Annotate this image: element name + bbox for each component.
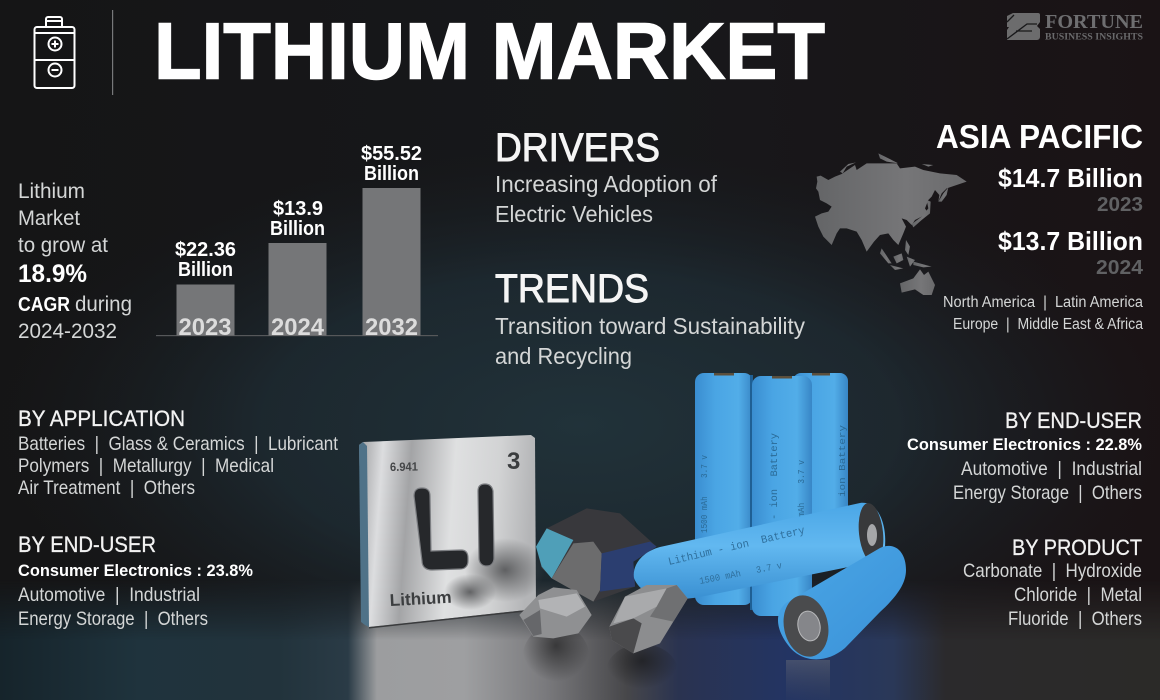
rock: small left <box>519 587 592 638</box>
bar 2023: $22.36 <box>175 239 236 261</box>
by application <box>18 406 338 499</box>
battery lying <box>634 502 886 599</box>
logo: Fortune Business Insights <box>1007 12 1143 42</box>
drivers: Increasing Adoption of <box>495 171 718 197</box>
by end-user right <box>907 408 1142 504</box>
by end-user left: Consumer Electronics : 23.8% <box>18 561 253 580</box>
element tile: lithium <box>359 435 545 628</box>
bar 2023 <box>175 239 236 341</box>
CAGR text block: Market <box>18 207 80 230</box>
Asia Pacific figures: 2024 <box>1096 257 1144 279</box>
CAGR text block: to grow at <box>18 234 108 257</box>
Asia Pacific figures: ASIA PACIFIC <box>936 118 1143 155</box>
battery centre: - ion Battery <box>769 433 781 520</box>
bar 2023: 2023 <box>178 314 232 341</box>
element tile: lithium: Lithium <box>389 588 452 610</box>
by product <box>963 535 1142 630</box>
battery lying: Lithium - ion Battery <box>667 525 807 569</box>
by end-user right: BY END-USER <box>1005 408 1142 433</box>
by product: Chloride | Metal <box>1014 584 1142 606</box>
bar 2032: $55.52 <box>361 143 422 165</box>
batteries standing <box>695 373 848 616</box>
background <box>0 195 1160 700</box>
lithium symbol letters <box>414 484 494 570</box>
by end-user right: Consumer Electronics : 22.8% <box>907 435 1142 454</box>
by product: Fluoride | Others <box>1008 608 1142 630</box>
icon: battery <box>34 17 74 88</box>
bar 2032: Billion <box>364 163 419 185</box>
by application: Batteries | Glass & Ceramics | Lubricant <box>18 433 338 455</box>
battery centre: mAh 3.7 v <box>797 459 807 517</box>
by application: Air Treatment | Others <box>18 477 195 499</box>
bar 2024: 2024 <box>271 314 325 341</box>
Asia Pacific figures: Europe | Middle East & Africa <box>953 316 1143 333</box>
battery left: 1500 mAh 3.7 v <box>700 455 710 533</box>
CAGR text block <box>18 180 132 343</box>
Asia Pacific figures: $13.7 Billion <box>998 226 1143 256</box>
Asia Pacific figures: North America | Latin America <box>943 294 1143 311</box>
CAGR text block: during <box>75 293 132 316</box>
trends: and Recycling <box>495 343 632 369</box>
trends: TRENDS <box>495 267 649 311</box>
by application: BY APPLICATION <box>18 406 185 431</box>
battery front <box>778 546 906 661</box>
bar 2024: $13.9 <box>273 198 323 220</box>
CAGR text block: CAGR <box>18 294 70 316</box>
drivers: Electric Vehicles <box>495 201 653 227</box>
element tile: lithium: 3 <box>507 448 520 475</box>
logo: Fortune Business Insights: FORTUNE <box>1045 12 1143 33</box>
bar 2032 <box>361 143 422 341</box>
element tile: lithium: 6.941 <box>390 460 418 474</box>
Asia Pacific figures <box>936 118 1144 333</box>
CAGR text block: 18.9% <box>18 260 87 288</box>
battery right back <box>793 373 848 543</box>
by end-user left <box>18 532 253 630</box>
battery left <box>695 373 753 605</box>
by end-user left: Automotive | Industrial <box>18 584 200 606</box>
drivers: DRIVERS <box>495 126 660 170</box>
rock: small right <box>609 585 688 653</box>
by end-user left: Energy Storage | Others <box>18 608 208 630</box>
battery lying: 1500 mAh 3.7 v <box>698 560 783 587</box>
trends: Transition toward Sustainability <box>495 313 805 339</box>
CAGR text block: Lithium <box>18 180 85 203</box>
bar 2032: 2032 <box>365 314 418 341</box>
bar 2024: Billion <box>270 218 325 240</box>
by end-user left: BY END-USER <box>18 532 156 557</box>
drivers <box>495 126 718 227</box>
header divider <box>112 10 113 95</box>
bar chart: market size <box>156 143 438 341</box>
CAGR text block: 2024-2032 <box>18 320 117 343</box>
battery right back: ion Battery <box>838 424 848 497</box>
logo: Fortune Business Insights: BUSINESS INSIGHTS <box>1045 32 1143 42</box>
Asia Pacific figures: $14.7 Billion <box>998 163 1143 193</box>
Asia Pacific figures: 2023 <box>1097 194 1143 216</box>
title: LITHIUM MARKET <box>154 6 825 96</box>
bar 2023: Billion <box>178 259 233 281</box>
battery centre <box>750 375 812 616</box>
by application: Polymers | Metallurgy | Medical <box>18 455 274 477</box>
map: Asia Pacific <box>815 153 967 295</box>
rock: large dark <box>536 508 657 602</box>
by product: BY PRODUCT <box>1012 535 1142 560</box>
by end-user right: Automotive | Industrial <box>961 458 1142 480</box>
trends <box>495 267 805 369</box>
bar 2024 <box>268 198 326 341</box>
